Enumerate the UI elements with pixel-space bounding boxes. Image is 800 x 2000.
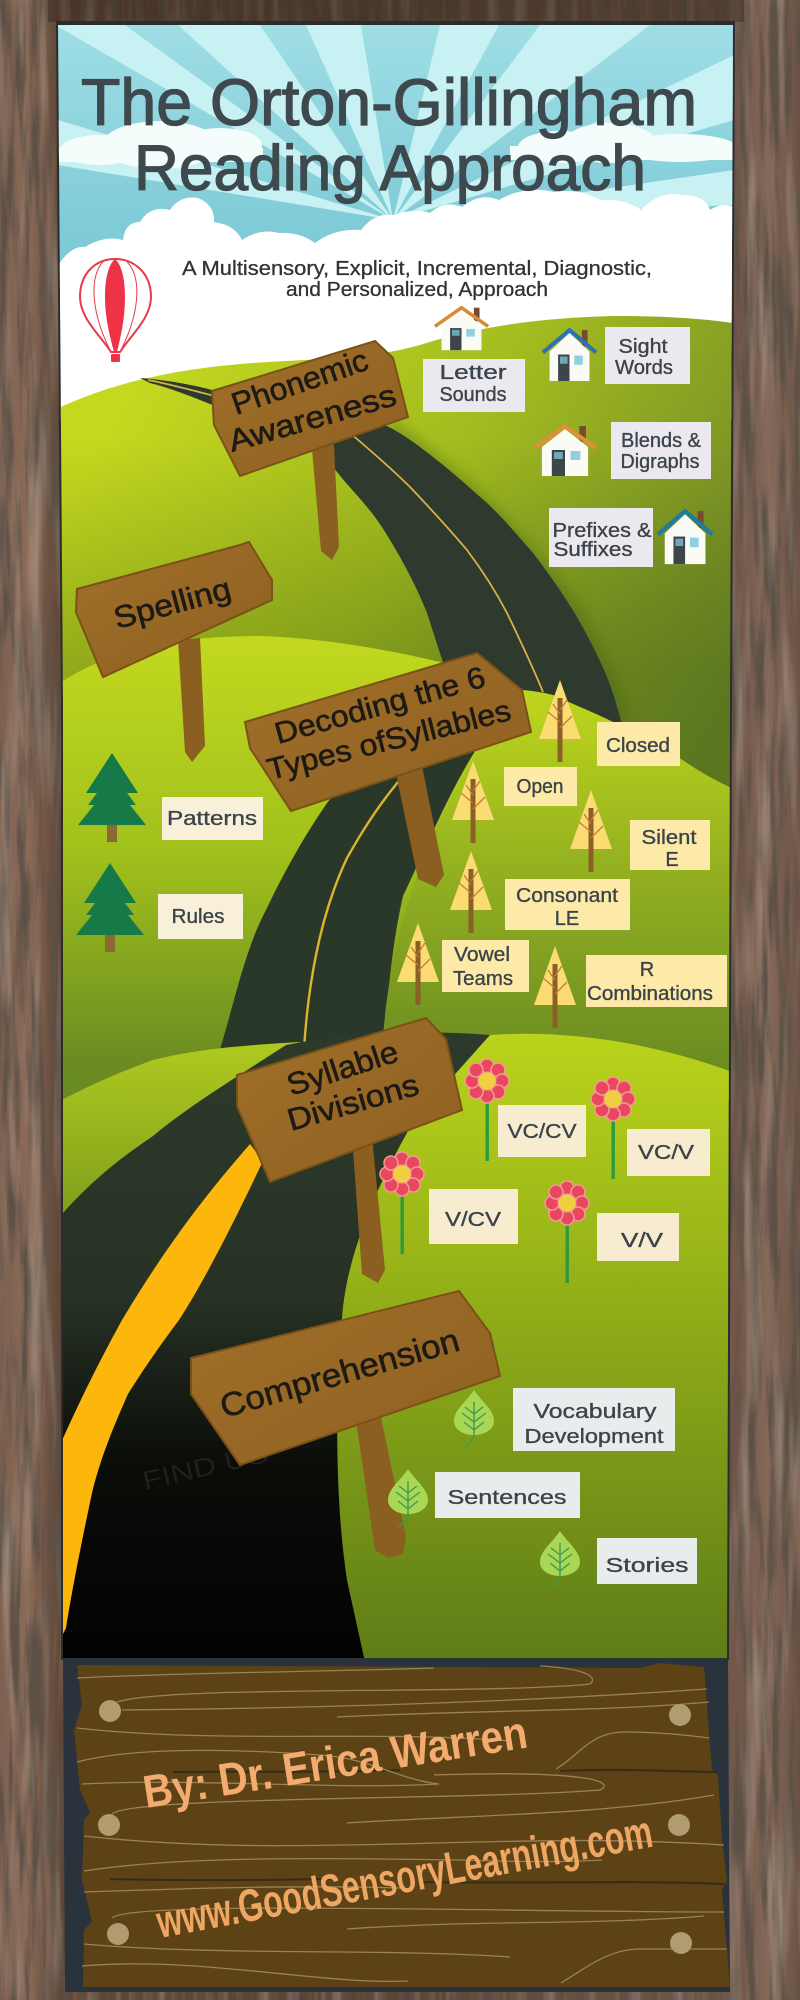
tree: open [452,761,494,843]
label: Sight Words: Sight [618,336,668,358]
label: Sentences [435,1472,580,1518]
icon: house blue [543,330,596,381]
label: Vowel Teams [442,940,529,992]
label: Closed [597,722,680,766]
label: V/V [597,1213,679,1261]
leaf 2 [388,1469,428,1527]
road centre line: middle [304,782,398,1050]
faint text: FIND US: FIND US [140,1438,271,1496]
label: VC/CV: VC/CV [508,1121,577,1143]
icon: house orange 1 [435,308,488,350]
label: Vowel Teams: Teams [453,968,513,990]
title: The Orton-Gillingham [81,65,697,139]
label: VC/CV [498,1105,586,1157]
icon: house orange 2 [534,426,596,476]
plank gaps [110,1770,724,1884]
label: Blends and Digraphs: Blends & [621,430,702,452]
sign: Decoding the 6 Types of Syllables: Types ofSyllables [264,694,514,787]
label: Sight Words [605,327,690,384]
hill: lower left [63,1042,300,1213]
sign: Spelling: Spelling [110,571,235,636]
label: VC/V [627,1129,710,1176]
panel border [56,21,735,1660]
label: Sight Words: Words [615,357,673,379]
label: Closed: Closed [606,735,670,757]
title [81,65,697,204]
sign: Decoding the 6 Types of Syllables [245,653,531,887]
houses group: phonics labels [423,308,712,567]
title: Reading Approach [134,132,646,204]
wood grain lines [77,1666,727,1983]
wooden board [74,1663,730,1987]
label: Prefixes and Suffixes [549,508,653,567]
leaf 3 [540,1531,580,1589]
yellow trees and syllable type labels [397,680,727,1028]
road centre line: upper [148,380,543,692]
author credit: By: Dr. Erica Warren [139,1706,531,1818]
sign: Phonemic Awareness [212,341,408,560]
label: V/CV [429,1189,518,1244]
label: R Combinations [586,955,727,1007]
label: Letter Sounds: Letter [440,362,507,384]
pine tree 2 [76,863,144,952]
label: Open [504,767,577,806]
label: Letter Sounds [423,359,525,412]
hill: left middle [50,636,500,1100]
label: Blends and Digraphs [611,422,711,479]
hill shading: upper [62,483,730,787]
subtitle: and Personalized, Approach [286,279,548,301]
sign: Decoding the 6 Types of Syllables: Decoding the 6 [271,661,489,751]
flower 3 [380,1152,424,1254]
hill: upper [50,316,740,1100]
leaves and comprehension labels [388,1388,697,1589]
nails [98,1700,692,1954]
icon: hot air balloon [80,259,151,362]
label: Silent E [630,820,710,871]
sign: Phonemic Awareness: Awareness [224,377,400,459]
label: Vocabulary Development: Development [524,1426,664,1448]
label: Stories [597,1538,697,1584]
road: upper [140,378,622,735]
label: Rules: Rules [172,906,224,928]
label: Patterns [162,797,263,840]
tree: silent e [570,790,612,872]
label: Consonant LE [505,879,630,930]
subtitle: A Multisensory, Explicit, Incremental, Diagnostic, [182,258,652,280]
sign: Comprehension [191,1291,500,1558]
sky with sun rays [50,20,750,320]
label: Rules [158,894,243,939]
label: R Combinations: Combinations [587,983,713,1005]
icon: house teal [658,511,712,564]
label: Sentences: Sentences [448,1487,566,1509]
hill: right middle [380,690,740,1100]
illustrated scene [50,20,750,1662]
tree: r combinations [534,946,576,1028]
subtitle [182,258,652,301]
label: Vocabulary Development [513,1388,675,1451]
label: Vocabulary Development: Vocabulary [534,1401,656,1423]
label: VC/V: VC/V [638,1142,695,1164]
label: R Combinations: R [640,959,654,981]
road: lower [50,1032,490,1662]
flower 2 [591,1077,635,1179]
label: Prefixes and Suffixes: Suffixes [554,539,632,561]
label: Patterns: Patterns [167,808,257,830]
flower 1 [465,1059,509,1161]
sign: Syllable Divisions: Divisions [283,1067,423,1138]
sign: Syllable Divisions: Syllable [282,1034,403,1103]
sign: Comprehension: Comprehension [216,1321,463,1425]
sign: Phonemic Awareness: Phonemic [227,342,373,422]
label: Prefixes and Suffixes: Prefixes & [552,520,652,542]
flowers and syllable division labels [380,1059,710,1283]
pine tree 1 [78,753,146,842]
road centre line: lower [60,1144,263,1640]
label: Letter Sounds: Sounds [440,384,506,406]
label: Blends and Digraphs: Digraphs [620,451,700,473]
label: Vowel Teams: Vowel [454,944,510,966]
flower 4 [545,1181,589,1283]
tree: consonant le [450,851,492,933]
label: Silent E: Silent [642,827,697,849]
label: Consonant LE: Consonant [516,885,618,907]
label: Stories: Stories [606,1555,688,1577]
label: Silent E: E [665,849,679,871]
label: V/V: V/V [621,1230,664,1252]
front white clouds [55,190,740,420]
sign: Spelling [76,542,272,762]
back clouds [58,121,738,169]
footer panel [63,1658,730,1992]
leaf 1 [454,1390,494,1448]
sign: Syllable Divisions [237,1018,462,1283]
tree: vowel teams [397,923,439,1005]
hill: lower right [337,1034,740,1662]
road shadow: upper [387,426,622,725]
road: middle [220,752,475,1048]
tree: closed [539,680,581,762]
label: V/CV: V/CV [445,1209,502,1231]
label: Open: Open [516,776,564,798]
label: Consonant LE: LE [555,908,579,930]
